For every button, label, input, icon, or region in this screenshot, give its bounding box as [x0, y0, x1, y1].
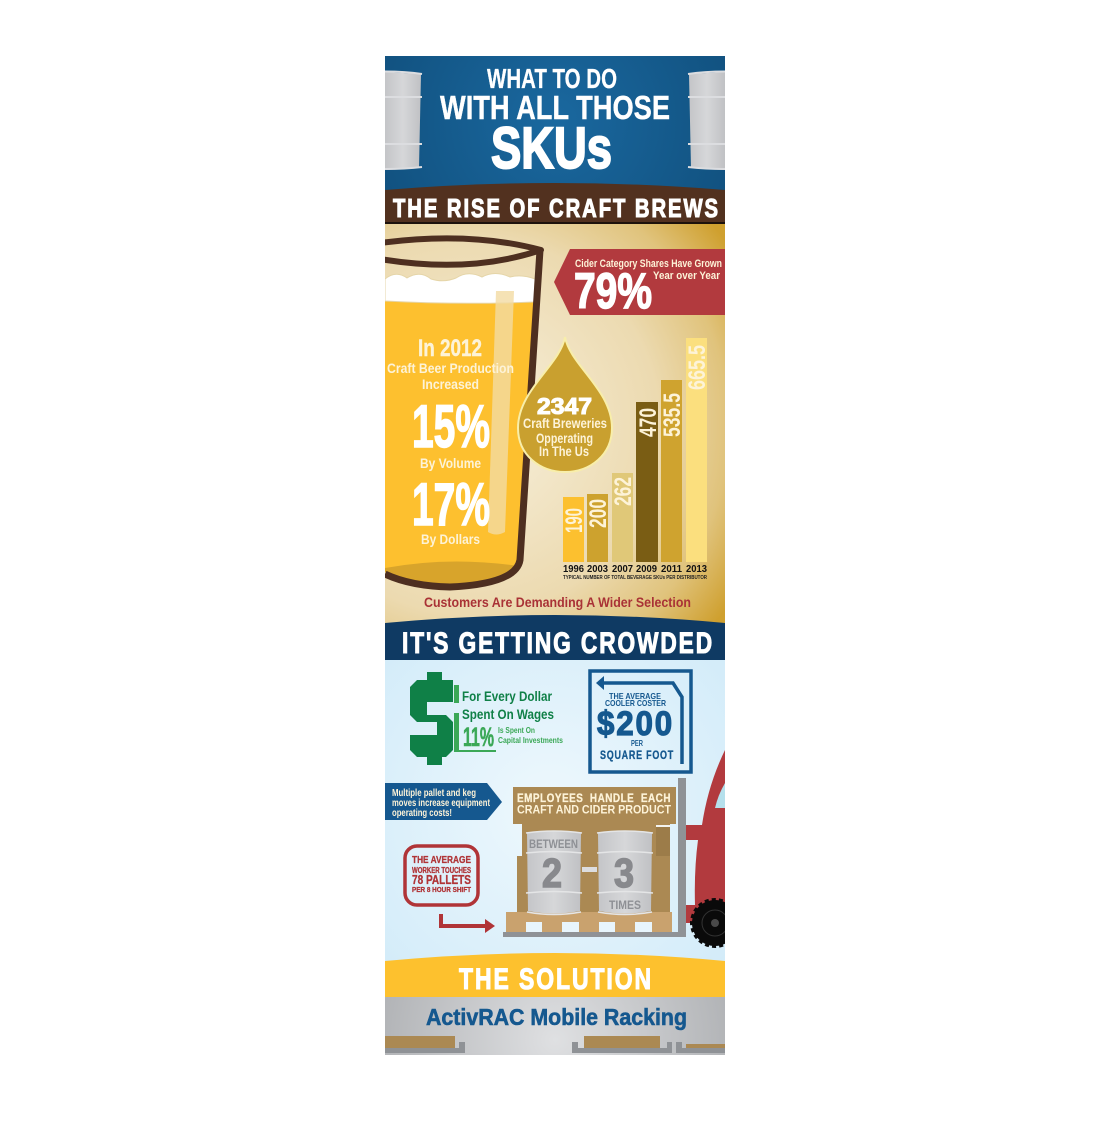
callout: breweries drop: Craft Breweries	[523, 416, 607, 431]
text: wages	[462, 691, 563, 746]
bar chart: TYPICAL NUMBER OF TOTAL BEVERAGE SKUs PER DISTRIBUTOR	[563, 575, 707, 581]
beer glass	[380, 238, 541, 587]
text: craft beer production: In 2012	[418, 335, 482, 362]
heading: it's getting crowded	[385, 615, 725, 660]
icon: dollar sign	[410, 672, 496, 765]
text: craft beer production: By Dollars	[421, 531, 480, 547]
icon: barrel 2: 2	[542, 850, 562, 896]
heading: the rise of craft brews	[385, 183, 725, 224]
sign: employees handle each product	[513, 787, 676, 824]
callout: pallet and keg moves: Multiple pallet and keg	[392, 787, 476, 799]
callout: cooler cost sign: COOLER COSTER	[605, 698, 666, 708]
bar chart: 190	[561, 508, 588, 533]
callout: breweries drop: In The Us	[539, 444, 589, 459]
icon: left barrel	[385, 72, 422, 170]
text: wages: Capital Investments	[498, 736, 563, 745]
text: wages: Is Spent On	[498, 726, 535, 735]
bar chart: 2009	[636, 564, 657, 575]
arrow: to pallet	[441, 914, 495, 933]
text: wages: 11%	[463, 722, 494, 752]
icon: right barrel	[688, 72, 725, 170]
icon: barrel 3: TIMES	[609, 900, 641, 912]
icon: forklift wheel	[690, 898, 725, 948]
bar chart: 2013	[686, 564, 707, 575]
heading: the solution: THE SOLUTION	[459, 963, 653, 996]
callout: average worker: PER 8 HOUR SHIFT	[412, 885, 471, 894]
bar chart: 470	[635, 408, 662, 437]
text: customers demanding: Customers Are Demanding A Wider Selection	[424, 594, 691, 610]
callout: cider category: 79%	[574, 263, 652, 319]
header panel	[385, 56, 725, 196]
icon: barrel 2: BETWEEN	[529, 837, 578, 851]
text: craft beer production: 17%	[412, 471, 490, 538]
title: WITH ALL THOSE	[440, 89, 670, 126]
text: craft beer production: 15%	[412, 393, 490, 460]
callout: cider category	[554, 249, 725, 319]
title: SKUs	[491, 116, 612, 181]
title	[440, 68, 670, 170]
callout: average worker: THE AVERAGE	[412, 854, 471, 866]
text: wages: For Every Dollar	[462, 688, 552, 704]
bar chart: 535.5	[659, 393, 686, 437]
sign: employees handle each product: EMPLOYEES HANDLE EACH	[517, 791, 671, 805]
text: craft beer production	[387, 335, 514, 547]
bar chart: 2003	[587, 564, 608, 575]
heading: the rise of craft brews: THE RISE OF CRAFT BREWS	[393, 193, 720, 223]
callout: average worker: WORKER TOUCHES	[412, 866, 471, 875]
text: wages: Spent On Wages	[462, 706, 554, 722]
callout: average worker: 78 PALLETS	[412, 873, 471, 887]
callout: breweries drop: Opperating	[536, 431, 593, 446]
callout: pallet and keg moves: operating costs!	[392, 807, 452, 819]
panel: activrac mobile racking: ActivRAC Mobile Racking	[426, 1004, 687, 1030]
bar chart: 200	[585, 499, 612, 528]
panel: the rise of craft brews background	[385, 224, 725, 626]
icon: barrel 3	[597, 831, 653, 914]
sign: employees handle each product: CRAFT AND CIDER PRODUCT	[517, 802, 672, 816]
callout: breweries drop	[518, 337, 612, 472]
bar chart: 2007	[612, 564, 633, 575]
callout: cooler cost sign: SQUARE FOOT	[600, 748, 674, 762]
text: craft beer production: By Volume	[420, 455, 481, 471]
bar chart: 2011	[661, 564, 682, 575]
icon: racking shelves	[385, 1036, 725, 1053]
bar chart	[561, 338, 711, 581]
text: craft beer production: Craft Beer Production	[387, 360, 514, 376]
heading: it's getting crowded: IT'S GETTING CROWDED	[402, 627, 714, 660]
bar chart: 1996	[563, 564, 584, 575]
icon: forklift cab	[686, 750, 725, 923]
pallet of barrels	[506, 824, 672, 932]
callout: cider category: Cider Category Shares Have Grown	[575, 258, 722, 270]
callout: cooler cost sign	[590, 671, 691, 772]
icon: barrel 3: 3	[614, 850, 634, 896]
panel: activrac mobile racking	[385, 997, 725, 1055]
callout: average worker	[405, 846, 478, 905]
text: craft beer production: Increased	[422, 376, 479, 392]
heading: the solution	[385, 953, 725, 997]
callout: cooler cost sign: THE AVERAGE	[609, 691, 661, 701]
icon: barrel 2	[526, 831, 582, 914]
callout: pallet and keg moves: moves increase equipment	[392, 797, 490, 809]
callout: cider category: Year over Year	[653, 270, 721, 282]
title: WHAT TO DO	[487, 63, 617, 94]
callout: pallet and keg moves	[385, 783, 502, 820]
bar chart: 262	[610, 477, 637, 506]
callout: cooler cost sign: $200	[597, 705, 674, 743]
bar chart: 665.5	[684, 345, 711, 390]
icon: forklift mast and forks	[503, 778, 686, 937]
callout: cooler cost sign: PER	[631, 739, 643, 748]
callout: breweries drop: 2347	[537, 393, 592, 419]
panel: crowded background	[385, 660, 725, 965]
